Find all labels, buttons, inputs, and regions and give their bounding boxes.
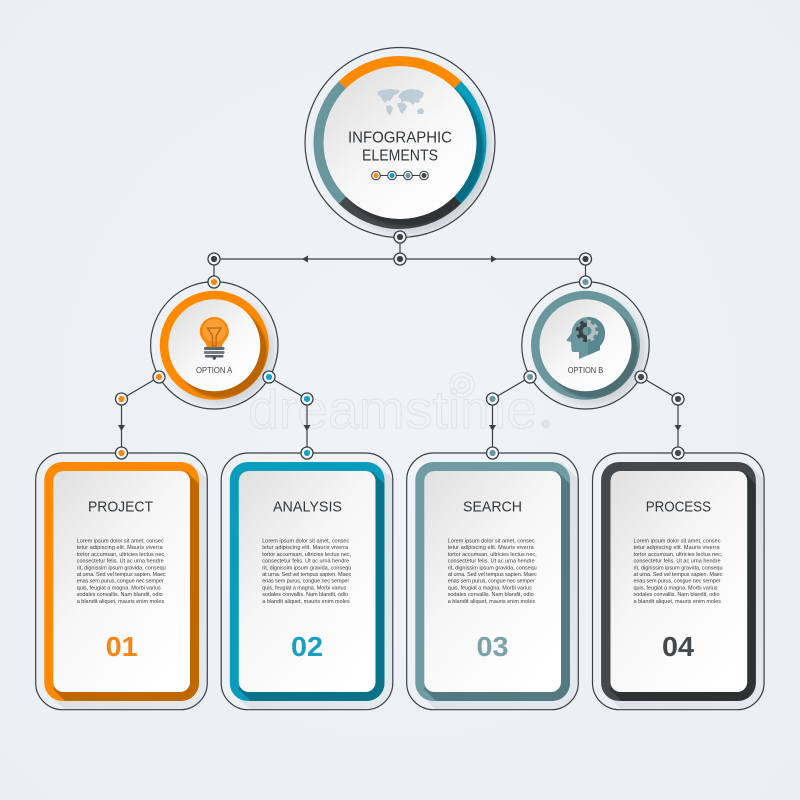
option B disk <box>540 299 632 391</box>
project outline <box>36 453 207 710</box>
process body text: tetur adipiscing elit. Mauris viverra <box>634 545 720 551</box>
process body text: quis, feugiat a magna. Morbi varius <box>634 586 718 592</box>
process outline <box>592 453 764 710</box>
project body text: rit, dignissim ipsum gravida, consequ <box>77 565 166 571</box>
search body text: at urna. Sed vel tempus sapien. Maec <box>448 572 537 578</box>
project body text: quis, feugiat a magna. Morbi varius <box>77 586 161 592</box>
option A <box>151 282 278 409</box>
panel: project <box>35 452 208 710</box>
search body text: tetur adipiscing elit. Mauris viverra <box>448 545 535 551</box>
project number: 01 <box>106 631 138 662</box>
project body text: a blandit aliquet, mauris enim moles <box>77 599 164 605</box>
search body text: sodales convallis. Nam blandit, odio <box>448 592 534 598</box>
project heading: PROJECT <box>88 499 153 516</box>
icon: head with gear <box>567 317 605 359</box>
project body text: tetur adipiscing elit. Mauris viverra <box>77 545 164 551</box>
main circle: infographic elements <box>305 48 495 238</box>
analysis body text: tetur adipiscing elit. Mauris viverra <box>262 545 349 551</box>
search body text: enas sem purus, congue nec semper <box>448 579 535 585</box>
panel: search <box>406 452 579 710</box>
project body text: Lorem ipsum dolor sit amet, consec <box>77 538 164 544</box>
option B label: OPTION B <box>568 365 603 375</box>
panel: process <box>592 452 765 710</box>
search frame shade <box>424 471 577 708</box>
process frame shade <box>610 471 763 708</box>
watermark: dreamstime <box>248 380 537 440</box>
analysis body text: enas sem purus, congue nec semper <box>262 579 349 585</box>
main subtitle: ELEMENTS <box>362 148 438 165</box>
option A ring <box>160 291 269 400</box>
analysis body text: rit, dignissim ipsum gravida, consequ <box>262 565 351 571</box>
option B <box>522 282 649 409</box>
project colour frame <box>44 462 199 701</box>
process card <box>610 471 747 692</box>
process body text: tortor accumsan, ultricies lectus nec, <box>634 552 723 558</box>
option A label: OPTION A <box>196 365 233 375</box>
project body text: consectetur felis. Ut ac urna hendre <box>77 558 164 564</box>
process body text: enas sem purus, congue nec semper <box>634 579 721 585</box>
analysis body text: sodales convallis. Nam blandit, odio <box>262 592 348 598</box>
search body text: consectetur felis. Ut ac urna hendre <box>448 558 535 564</box>
option B ring <box>531 291 640 400</box>
connector nodes <box>116 231 684 459</box>
search number: 03 <box>476 631 508 662</box>
panel: analysis <box>220 452 394 710</box>
option A ring shade <box>174 305 267 398</box>
main circle outline <box>305 48 495 238</box>
analysis card <box>239 471 376 692</box>
main ring inner shade <box>342 83 484 226</box>
analysis heading: ANALYSIS <box>273 499 342 516</box>
analysis body text: a blandit aliquet, mauris enim moles <box>262 599 350 605</box>
process body text: at urna. Sed vel tempus sapien. Maec <box>634 572 723 578</box>
option B ring shade <box>552 312 639 399</box>
search body text <box>448 538 537 605</box>
search heading: SEARCH <box>463 499 522 516</box>
main title: INFOGRAPHIC <box>348 130 452 147</box>
search body text: Lorem ipsum dolor sit amet, consec <box>448 538 535 544</box>
search body text: tortor accumsan, ultricies lectus nec, <box>448 552 537 558</box>
connector lines <box>122 237 678 453</box>
search body text: rit, dignissim ipsum gravida, consequ <box>448 565 537 571</box>
analysis outline <box>221 453 393 710</box>
icon: light bulb <box>200 317 229 360</box>
option B outline <box>522 282 649 409</box>
analysis body text: Lorem ipsum dolor sit amet, consec <box>262 538 349 544</box>
search body text: a blandit aliquet, mauris enim moles <box>448 599 535 605</box>
analysis number: 02 <box>291 631 323 662</box>
option A outline <box>151 282 278 409</box>
process colour frame <box>601 462 756 701</box>
search body text: quis, feugiat a magna. Morbi varius <box>448 586 532 592</box>
process heading: PROCESS <box>646 499 711 516</box>
search colour frame <box>415 462 570 701</box>
analysis body text <box>262 538 352 605</box>
process long shadow <box>602 462 764 709</box>
icon: world map <box>377 89 424 116</box>
process body text: Lorem ipsum dolor sit amet, consec <box>634 538 721 544</box>
project long shadow <box>45 462 206 709</box>
project body text: sodales convallis. Nam blandit, odio <box>77 592 163 598</box>
analysis long shadow <box>230 462 392 709</box>
search long shadow <box>416 462 578 709</box>
process body text: sodales convallis. Nam blandit, odio <box>634 592 720 598</box>
main white disk <box>324 66 476 219</box>
mini node row <box>372 171 428 180</box>
project body text: tortor accumsan, ultricies lectus nec, <box>77 552 166 558</box>
main ring segments <box>319 61 481 224</box>
process body text <box>634 538 723 605</box>
analysis body text: quis, feugiat a magna. Morbi varius <box>262 586 346 592</box>
option A disk <box>168 299 260 391</box>
process body text: a blandit aliquet, mauris enim moles <box>634 599 721 605</box>
connector arrows <box>118 256 682 431</box>
analysis colour frame <box>230 462 384 701</box>
main circle shadow <box>345 88 494 236</box>
process body text: consectetur felis. Ut ac urna hendre <box>634 558 720 564</box>
search outline <box>407 453 578 710</box>
project body text: enas sem purus, congue nec semper <box>77 579 164 585</box>
process number: 04 <box>662 631 694 662</box>
analysis body text: consectetur felis. Ut ac urna hendre <box>262 558 349 564</box>
project body text <box>77 538 166 605</box>
option B shadow <box>538 297 646 405</box>
analysis frame shade <box>238 471 392 708</box>
analysis body text: at urna. Sed vel tempus sapien. Maec <box>262 572 351 578</box>
search card <box>424 471 561 692</box>
project card <box>53 471 190 692</box>
project frame shade <box>53 471 206 708</box>
analysis body text: tortor accumsan, ultricies lectus nec, <box>262 552 352 558</box>
option A shadow <box>166 297 274 405</box>
project body text: at urna. Sed vel tempus sapien. Maec <box>77 572 166 578</box>
process body text: rit, dignissim ipsum gravida, consequ <box>634 565 722 571</box>
